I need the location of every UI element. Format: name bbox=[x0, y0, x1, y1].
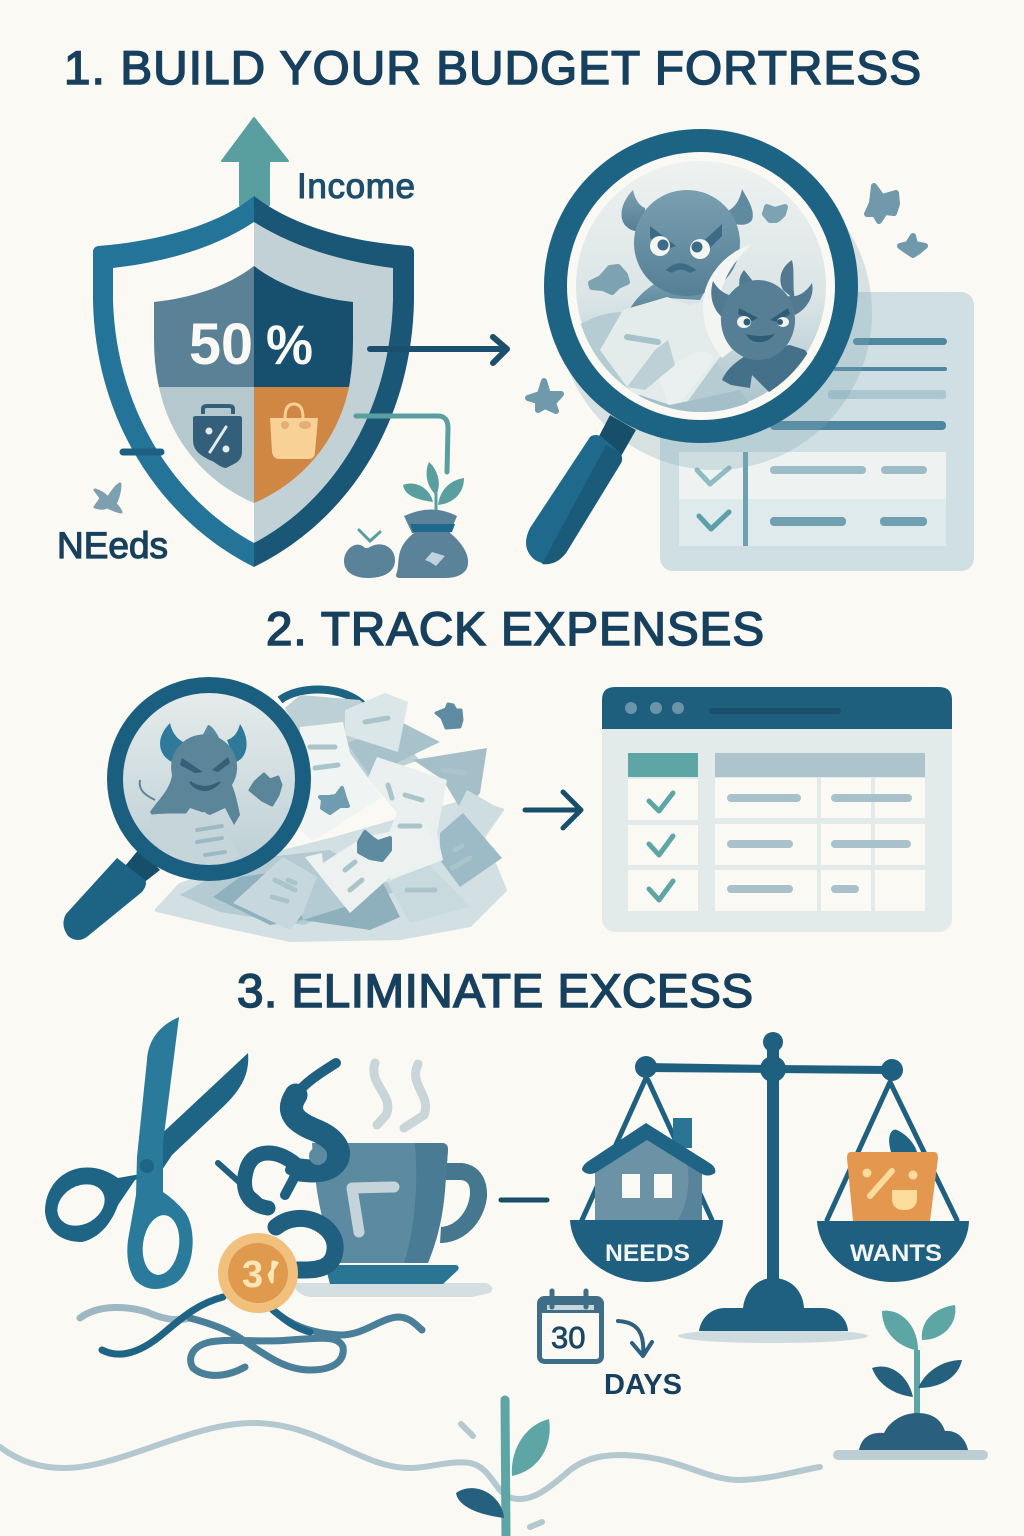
icon: magnifier handle bbox=[63, 848, 160, 940]
star on paper bbox=[320, 788, 348, 813]
blob sparkles in lens bbox=[591, 207, 785, 292]
ropes bbox=[80, 1297, 422, 1375]
label: 50 percent: 50 bbox=[189, 312, 253, 377]
scale stand bbox=[635, 1032, 903, 1331]
icon: growing plant bbox=[833, 1305, 988, 1460]
icon: discount bag bbox=[193, 406, 242, 468]
arrow: to magnifier bbox=[370, 337, 507, 363]
icon: 30 day calendar bbox=[540, 1291, 602, 1362]
arrow: income up bbox=[222, 118, 288, 205]
pan: wants: WANTS bbox=[850, 1240, 942, 1267]
icon: coffee cup bbox=[312, 1143, 487, 1263]
connector: needs dash bbox=[123, 448, 161, 456]
panel: magnifier over budget sheet bbox=[526, 140, 974, 571]
label: days: DAYS bbox=[604, 1369, 682, 1401]
icon: seedling on money bag bbox=[344, 462, 468, 578]
icon: coin: 3 bbox=[242, 1254, 263, 1296]
icon: tote bag bbox=[270, 404, 318, 459]
lens shadow bbox=[558, 156, 872, 470]
icon: 30 day calendar: 30 bbox=[551, 1320, 585, 1355]
squiggles bbox=[218, 1063, 339, 1208]
panel: needs vs wants scale bbox=[570, 1032, 969, 1343]
scale base shadow bbox=[678, 1329, 868, 1343]
label: needs: NEeds bbox=[57, 525, 168, 566]
big monster bbox=[621, 189, 753, 320]
lens ring bbox=[115, 685, 303, 873]
title: section 3: 3. ELIMINATE EXCESS bbox=[237, 965, 753, 1018]
panel: cutting expenses bbox=[45, 1017, 492, 1375]
connector: shield to savings bbox=[356, 416, 448, 472]
window header bbox=[602, 687, 952, 729]
monster in lens bbox=[140, 723, 281, 867]
saucer shadow bbox=[293, 1283, 492, 1297]
checkmarks bbox=[649, 793, 673, 900]
arrow: calendar curve bbox=[618, 1321, 652, 1356]
label: 50 percent bbox=[189, 312, 313, 377]
icon: magnifier handle bbox=[526, 415, 636, 564]
connector: cup to scale bbox=[501, 1198, 547, 1202]
star sparkles bbox=[528, 186, 925, 411]
saucer bbox=[325, 1265, 459, 1284]
paper pile bbox=[157, 693, 505, 940]
cup highlight circle bbox=[309, 1147, 327, 1165]
arrow: pile to spreadsheet bbox=[525, 792, 581, 828]
lens bbox=[119, 689, 299, 869]
small monster bbox=[711, 260, 813, 400]
icon: bottom seedling bbox=[456, 1400, 550, 1536]
lens bbox=[555, 140, 847, 432]
paper pile in lens bbox=[581, 297, 748, 412]
blob on paper bbox=[359, 832, 390, 860]
panel: expense pile under magnifier bbox=[63, 685, 505, 940]
pan: needs: NEEDS bbox=[605, 1240, 690, 1267]
white swoosh bbox=[703, 244, 752, 358]
label: income: Income bbox=[297, 167, 415, 206]
arch behind lens bbox=[280, 690, 365, 707]
strings bbox=[582, 1078, 957, 1220]
label: 50 percent: % bbox=[266, 313, 313, 376]
big monster face bbox=[650, 224, 722, 272]
icon: coin bbox=[218, 1233, 298, 1313]
pan: needs bbox=[570, 1220, 723, 1282]
steam bbox=[374, 1063, 426, 1128]
icon: house bbox=[582, 1118, 715, 1220]
document: budget sheet bbox=[660, 292, 974, 571]
icon: small star bbox=[95, 484, 121, 512]
lens contents: paper and monsters bbox=[570, 189, 813, 420]
panel: spreadsheet window bbox=[602, 687, 952, 932]
table header cells bbox=[628, 753, 925, 777]
panel: budget fortress shield bbox=[57, 118, 507, 578]
icon: shopping bag bbox=[847, 1130, 938, 1221]
shield frame bbox=[93, 196, 414, 567]
lens ring bbox=[556, 140, 846, 432]
title: section 1: 1. BUILD YOUR BUDGET FORTRESS bbox=[64, 42, 921, 95]
bottom wave line bbox=[0, 1423, 820, 1499]
title: section 2: 2. TRACK EXPENSES bbox=[266, 603, 764, 656]
shield quadrants bbox=[154, 266, 353, 503]
pan: wants bbox=[817, 1221, 969, 1282]
icon: scissors bbox=[45, 1017, 248, 1289]
blob top right bbox=[436, 704, 462, 728]
squiggle: lower curl bbox=[276, 1218, 335, 1270]
table body bbox=[628, 778, 925, 911]
